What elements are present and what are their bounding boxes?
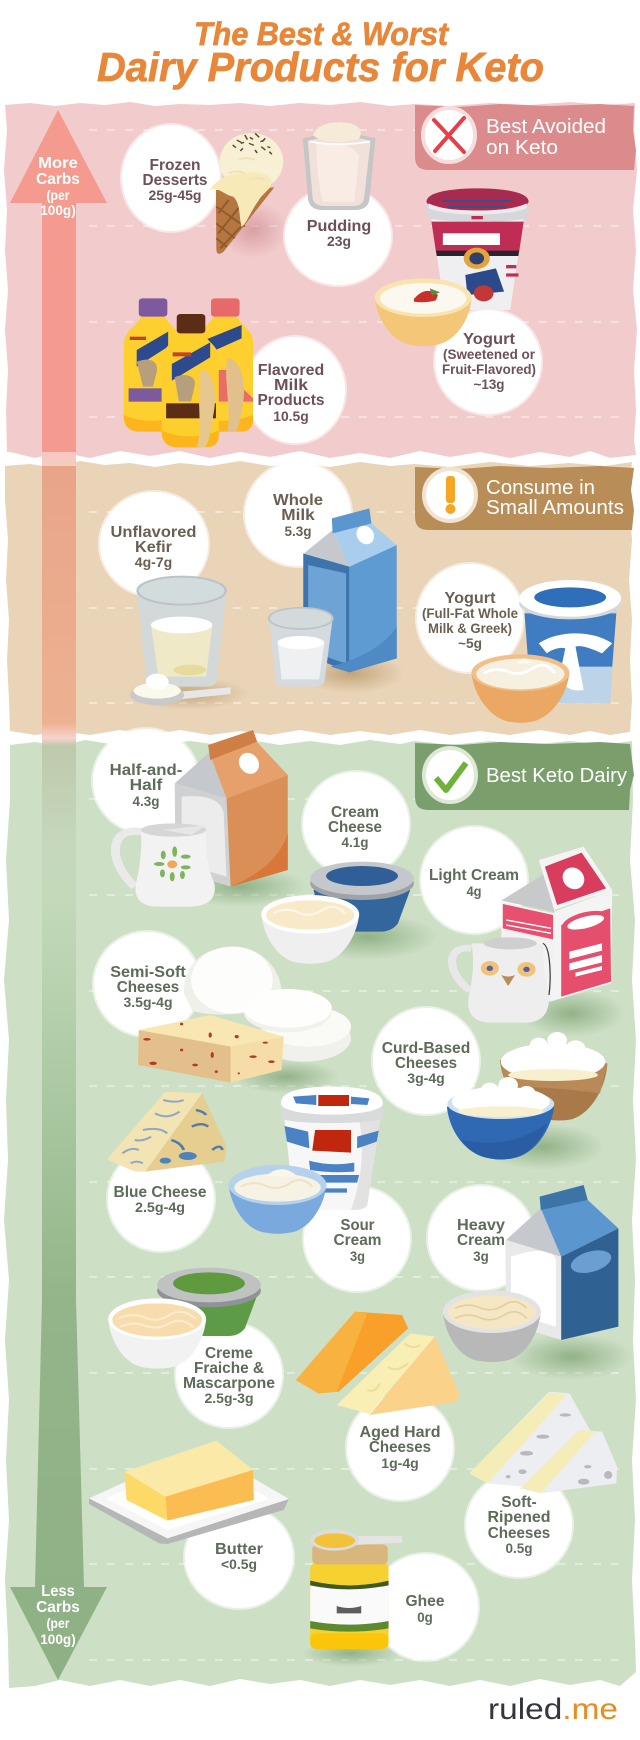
- legend tag: best keto dairy: Best Keto Dairy: [486, 765, 627, 787]
- icon: bowls of cottage cheese: [447, 1032, 607, 1170]
- legend tag: best keto dairy: [415, 742, 634, 810]
- item: frozen desserts: [122, 125, 288, 258]
- label: [334, 1217, 382, 1264]
- bubble: [303, 772, 409, 876]
- label: Half: [130, 777, 163, 794]
- label: [183, 1345, 275, 1406]
- arrow: more carbs to less carbs: Carbs: [36, 1599, 80, 1616]
- icon: milk bottles: [124, 298, 253, 447]
- label: 0g: [417, 1609, 433, 1625]
- label: 0.5g: [506, 1540, 532, 1556]
- arrow: more carbs to less carbs: Less: [41, 1583, 75, 1600]
- icon: butter on plate: [89, 1441, 289, 1544]
- bubble: [245, 337, 345, 443]
- item: butter: [89, 1441, 293, 1608]
- bubble: [373, 1008, 479, 1114]
- label: Unflavored: [110, 524, 196, 541]
- bubble: [185, 1506, 293, 1608]
- icon: blue bowl of sour cream: [229, 1165, 327, 1234]
- icon: kefir glass and spoon: [127, 577, 249, 710]
- label: Pudding: [307, 218, 371, 235]
- item: full-fat yogurt: [417, 564, 621, 723]
- carb level dashed lines: [89, 130, 624, 1660]
- label: 3g: [473, 1248, 489, 1264]
- label: Cheeses: [395, 1055, 457, 1072]
- bubble: [304, 1187, 410, 1291]
- label: Aged Hard: [360, 1424, 440, 1441]
- label: Half-and-: [110, 762, 182, 779]
- icon: yogurt bowl with strawberry: [375, 278, 472, 346]
- bubble: [417, 564, 523, 672]
- panel: pink band best avoided: [4, 102, 637, 458]
- bubble: [347, 1396, 453, 1500]
- legend tag: consume in small amounts: Small Amounts: [486, 497, 624, 519]
- arrow: more carbs to less carbs: [10, 110, 107, 1680]
- label: Milk: [274, 377, 308, 394]
- label: [328, 804, 382, 850]
- label: 3.5g-4g: [124, 994, 172, 1010]
- arrow: more carbs to less carbs: More: [38, 155, 78, 172]
- label: [442, 331, 536, 392]
- icon: green tub and white bowl: [108, 1268, 261, 1369]
- label: 4.1g: [342, 834, 368, 850]
- label: Fraiche &: [194, 1360, 264, 1377]
- panel: green band best keto dairy: [4, 740, 636, 1688]
- label: Creme: [205, 1345, 253, 1362]
- title: [97, 16, 544, 90]
- label: 4.3g: [132, 793, 160, 809]
- item: semi-soft cheeses: [94, 932, 351, 1093]
- item: blue cheese: [107, 1092, 227, 1251]
- icon: soft-ripened cheese wedges: [469, 1392, 617, 1493]
- legend tag: best avoided on keto: [415, 104, 636, 170]
- icon: blue milk carton: [298, 508, 404, 693]
- icon: pudding glass: [303, 122, 376, 210]
- bubble: [466, 1473, 572, 1577]
- arrow: more carbs to less carbs: (per: [46, 1616, 70, 1631]
- label: 2.5g-4g: [135, 1199, 185, 1215]
- item: pudding: [285, 122, 391, 285]
- bubble: [108, 1147, 214, 1251]
- arrow: more carbs to less carbs: 100g): [40, 203, 76, 218]
- label: Ghee: [406, 1593, 445, 1610]
- arrow: more carbs to less carbs: (per: [46, 188, 70, 203]
- label: Fruit-Flavored): [442, 362, 536, 377]
- label: 2.5g-3g: [204, 1390, 254, 1406]
- label: [110, 964, 186, 1010]
- label: [110, 524, 196, 570]
- label: Ripened: [488, 1509, 550, 1526]
- label: 23g: [327, 233, 351, 249]
- icon: ghee jar and spoon: [302, 1529, 402, 1667]
- bubble: [372, 1554, 478, 1660]
- icon: dark blue tub: [298, 862, 437, 960]
- item: creme fraiche and mascarpone: [108, 1268, 282, 1427]
- icon: yogurt tub: [427, 188, 529, 310]
- bubble: [421, 827, 527, 933]
- label: 3g: [350, 1248, 365, 1264]
- label: Butter: [215, 1541, 263, 1558]
- icon: orange yogurt bowl: [471, 654, 569, 723]
- item: flavored milk products: [124, 298, 345, 447]
- label: Blue Cheese: [114, 1184, 207, 1201]
- label: Kefir: [135, 539, 172, 556]
- item: aged hard cheeses: [296, 1312, 459, 1500]
- icon: mozzarella and block cheese: [138, 947, 351, 1093]
- label: [488, 1494, 550, 1556]
- panel: tan band small amounts: [5, 461, 632, 735]
- logo: ruled.me: ruled .me: [488, 1693, 618, 1726]
- label: [429, 867, 519, 899]
- label: [307, 218, 371, 249]
- legend tag: consume in small amounts: Consume in: [486, 477, 595, 499]
- item: sour cream: [229, 1087, 410, 1291]
- label: Light Cream: [429, 867, 519, 884]
- bubble: [100, 492, 208, 596]
- item: sweetened yogurt: [375, 188, 541, 414]
- title: Dairy Products for Keto: [97, 44, 544, 90]
- item: curd-based cheeses: [373, 1008, 607, 1170]
- item: ghee: [302, 1529, 478, 1667]
- label: ~13g: [474, 376, 504, 392]
- icon: orange carton: [175, 730, 306, 907]
- icon: white flower pitcher: [115, 823, 215, 907]
- label: Soft-: [501, 1494, 537, 1511]
- label: [406, 1593, 445, 1625]
- label: Yogurt: [444, 590, 496, 607]
- item: heavy cream: [428, 1185, 633, 1380]
- item: cream cheese: [261, 772, 437, 964]
- item: soft-ripened cheeses: [466, 1392, 617, 1577]
- label: [360, 1424, 440, 1471]
- icon: blue yogurt tub: [519, 580, 621, 703]
- label: (Full-Fat Whole: [422, 606, 518, 621]
- label: Yogurt: [463, 331, 516, 348]
- label: Cream: [457, 1232, 505, 1249]
- label: 10.5g: [273, 408, 309, 424]
- label: Cream: [331, 804, 379, 821]
- label: Products: [258, 392, 325, 409]
- label: Semi-Soft: [110, 964, 186, 981]
- label: Cheeses: [488, 1525, 550, 1542]
- label: 3g-4g: [407, 1070, 445, 1086]
- item: whole milk: [245, 462, 404, 693]
- label: Desserts: [142, 172, 208, 189]
- label: Whole: [273, 492, 323, 509]
- bubble: [122, 125, 220, 231]
- legend tag: best avoided on keto: on Keto: [486, 137, 558, 159]
- label: 4g-7g: [135, 554, 172, 570]
- label: Cheeses: [117, 979, 179, 996]
- icon: ice cream cone: [210, 133, 288, 258]
- label: Milk: [281, 507, 315, 524]
- legend tag: consume in small amounts: [415, 466, 634, 530]
- label: [422, 590, 518, 651]
- label: Frozen: [150, 157, 200, 174]
- label: Cream: [334, 1232, 382, 1249]
- label: [215, 1541, 263, 1572]
- icon: red and white carton: [501, 847, 624, 1037]
- icon: dark blue carton and gray bowl: [443, 1185, 633, 1380]
- label: 5.3g: [284, 523, 312, 539]
- item: half-and-half: [93, 729, 306, 907]
- label: [258, 362, 325, 424]
- label: [142, 157, 208, 203]
- icon: aged cheese wedges: [296, 1312, 459, 1415]
- label: [273, 492, 323, 539]
- label: Mascarpone: [183, 1375, 275, 1392]
- label: Sour: [340, 1217, 374, 1234]
- label: 1g-4g: [381, 1455, 419, 1471]
- label: [114, 1184, 207, 1215]
- label: <0.5g: [221, 1556, 257, 1572]
- arrow: more carbs to less carbs: Carbs: [36, 171, 80, 188]
- label: [110, 762, 182, 809]
- icon: sour cream tub: [281, 1087, 383, 1210]
- bubble: [435, 310, 541, 414]
- label: Cheese: [328, 819, 382, 836]
- label: [457, 1217, 505, 1264]
- arrow: more carbs to less carbs: 100g): [40, 1632, 76, 1647]
- bubble: [93, 729, 199, 833]
- item: unflavored kefir: [100, 492, 249, 710]
- bubble: [94, 932, 200, 1036]
- bubble: [285, 187, 391, 285]
- label: ~5g: [458, 635, 482, 651]
- bubble: [176, 1323, 282, 1427]
- item: light cream: [421, 827, 624, 1037]
- bubble: [428, 1186, 534, 1290]
- icon: white bowl of cream cheese: [261, 895, 359, 964]
- label: Cheeses: [369, 1439, 431, 1456]
- label: [382, 1040, 470, 1086]
- label: 4g: [466, 883, 482, 899]
- icon: small glass of milk: [269, 608, 333, 687]
- label: Heavy: [457, 1217, 505, 1234]
- label: 25g-45g: [148, 187, 202, 203]
- label: Milk & Greek): [428, 621, 512, 636]
- bubble: [245, 462, 351, 566]
- label: Flavored: [258, 362, 324, 379]
- legend tag: best avoided on keto: Best Avoided: [486, 116, 606, 138]
- icon: owl pitcher: [452, 937, 550, 1023]
- label: (Sweetened or: [443, 347, 536, 362]
- title: The Best & Worst: [194, 16, 449, 52]
- label: Curd-Based: [382, 1040, 470, 1057]
- icon: blue cheese wedge: [107, 1092, 227, 1172]
